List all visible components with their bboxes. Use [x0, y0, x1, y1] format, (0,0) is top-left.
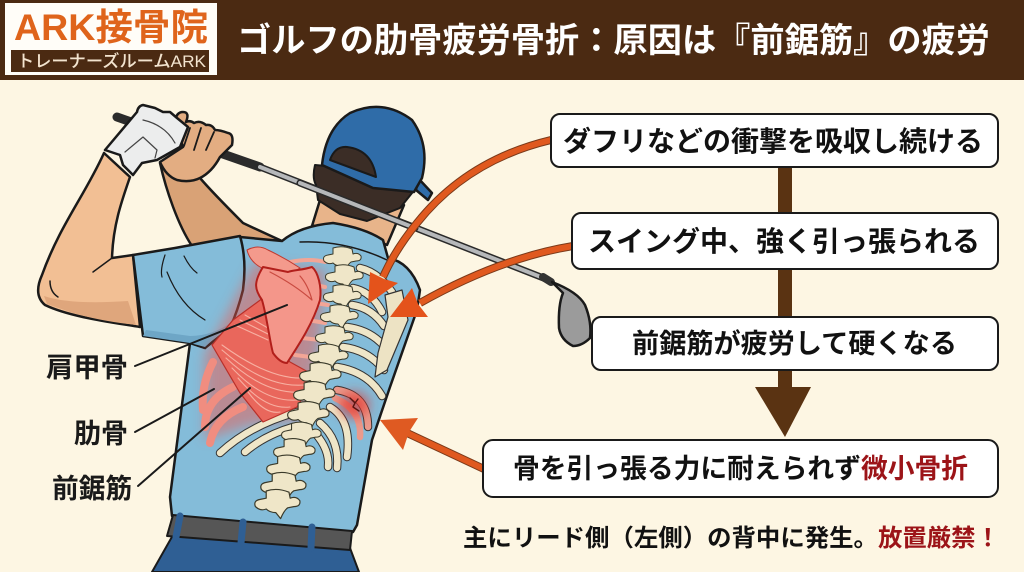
pointer arrow 1 — [368, 140, 551, 304]
scapula left — [247, 247, 321, 363]
title: ゴルフの肋骨疲労骨折：原因は『前鋸筋』の疲労 — [237, 21, 990, 60]
belt — [167, 515, 352, 550]
collar band — [300, 242, 387, 260]
step box 4: 骨を引っ張る力に耐えられず微小骨折 — [513, 454, 968, 484]
neck — [312, 200, 404, 245]
anatomy labels: 肩甲骨 — [46, 353, 128, 383]
scapula right — [375, 290, 408, 377]
step box 1 — [551, 114, 998, 167]
leader lines — [135, 305, 287, 486]
glove — [105, 105, 188, 175]
pointer arrow 2 — [390, 246, 573, 317]
flow arrow: brown — [755, 165, 811, 437]
serratus anterior muscle — [212, 298, 310, 422]
step box 2 — [572, 213, 998, 269]
anatomy labels: 肋骨 — [74, 419, 128, 449]
step box 1: ダフリなどの衝撃を吸収し続ける — [563, 125, 983, 157]
muscle glow — [205, 262, 325, 440]
anatomy labels — [46, 353, 132, 504]
pointer arrow 3 — [380, 418, 484, 469]
footnote: 主にリード側（左側）の背中に発生。 放置厳禁！ — [463, 525, 1000, 552]
ribs between scapula and spine — [290, 260, 328, 358]
golfer illustration — [38, 105, 590, 572]
header band — [0, 0, 1024, 80]
trousers — [152, 535, 359, 572]
step box 3: 前鋸筋が疲労して硬くなる — [632, 328, 957, 359]
spine — [255, 247, 363, 519]
lower left ribs — [203, 362, 243, 443]
re-drawn shaft over the head — [300, 183, 415, 228]
logo: トレーナーズルームARK — [17, 51, 207, 71]
anatomy labels: 前鋸筋 — [52, 474, 132, 504]
hand — [160, 112, 232, 181]
far forearm — [160, 163, 282, 246]
step box 4 — [483, 440, 998, 497]
step box 2: スイング中、強く引っ張られる — [588, 225, 980, 257]
fracture site — [339, 392, 369, 418]
near arm — [38, 153, 140, 327]
logo — [5, 3, 217, 75]
ear and hair — [314, 165, 416, 221]
step box 3 — [592, 317, 998, 370]
shirt body — [170, 223, 420, 532]
right and lower ribs — [220, 268, 392, 468]
sleeve — [133, 236, 244, 348]
logo: ARK接骨院 — [14, 7, 208, 48]
cap — [322, 107, 432, 200]
golf club — [117, 117, 590, 346]
